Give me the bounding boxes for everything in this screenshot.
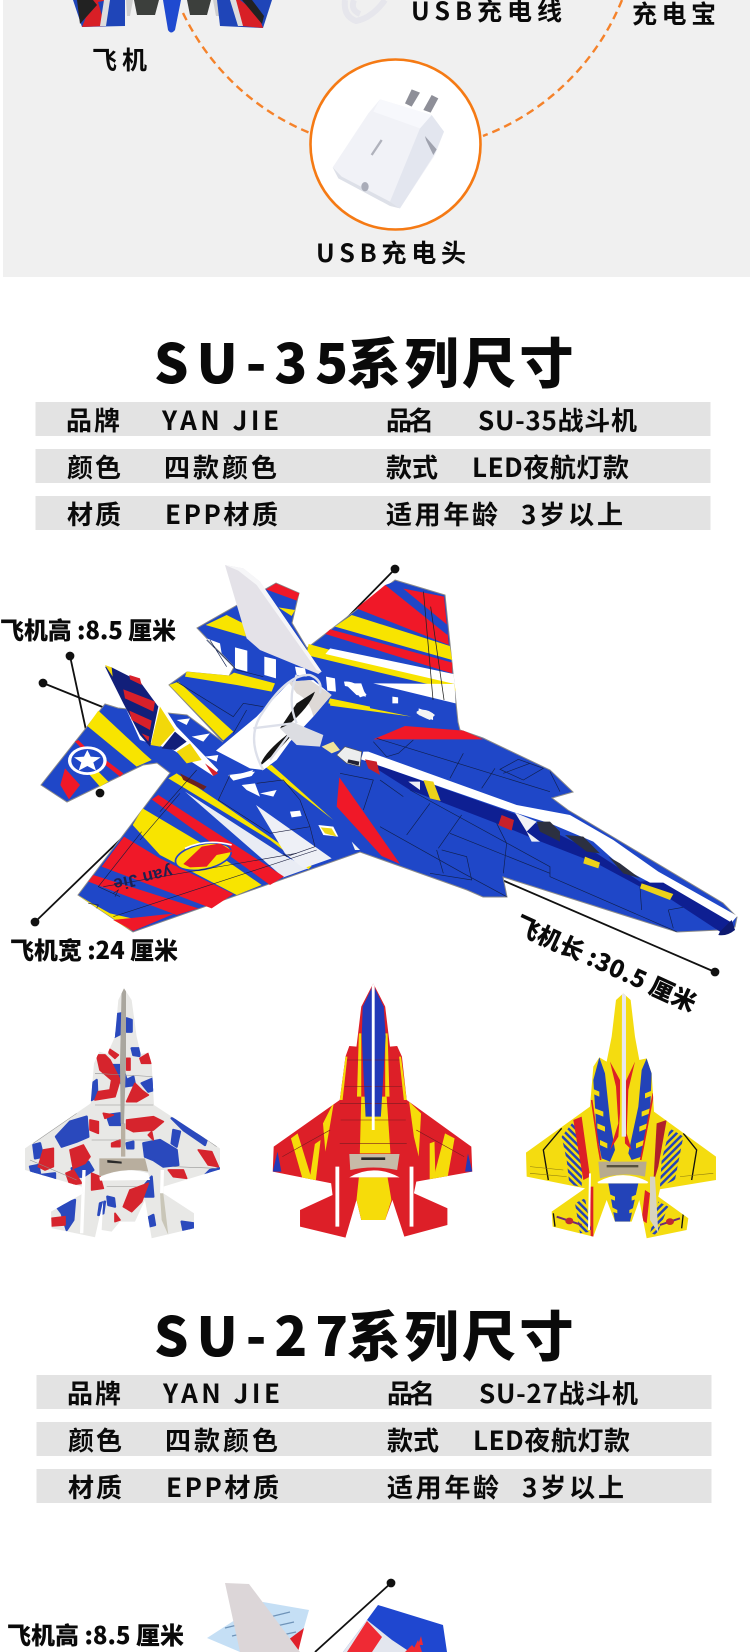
far fin white xyxy=(225,565,322,674)
heading: SU-27 series dimensions: SU-27 xyxy=(154,1293,356,1372)
tail colours xyxy=(88,772,108,787)
fuselage details xyxy=(337,710,737,935)
near fin xyxy=(103,663,218,776)
plane silhouette xyxy=(41,580,737,932)
plane: camouflage white xyxy=(25,988,220,1238)
far wing white and red xyxy=(343,1620,410,1652)
spec: style: 款式 xyxy=(387,1421,439,1458)
chart: SU-35 main plane xyxy=(41,565,737,935)
spec: material: 材质 xyxy=(68,1468,122,1505)
panel: SU-27 spec table xyxy=(36,1374,712,1505)
stabilizer stripes xyxy=(225,1612,296,1644)
panel: accessories on grey background xyxy=(3,0,750,277)
guard ring xyxy=(253,675,321,770)
spec: brand value: YAN JIE xyxy=(162,1374,280,1411)
spec: material: 材质 xyxy=(67,495,121,532)
root cutouts xyxy=(228,772,338,837)
spec: brand: 品牌 xyxy=(67,1374,121,1411)
navy canopy floor xyxy=(362,759,735,932)
spec: color value: 四款颜色 xyxy=(165,1421,278,1458)
label: plane length: 飞机长 :30.5 厘米 xyxy=(510,906,703,1019)
coloured tags xyxy=(365,759,514,831)
icon: airplane fragment xyxy=(73,0,272,32)
icon: usb charger in orange circle xyxy=(310,60,480,230)
white vertical fin xyxy=(225,1583,300,1652)
spec: material value: EPP材质 xyxy=(166,1468,279,1505)
panel lines xyxy=(177,640,263,733)
white canopy frame xyxy=(361,752,737,923)
spec: age: 适用年龄 xyxy=(386,495,498,532)
far wing xyxy=(343,1605,447,1652)
motor xyxy=(280,722,323,747)
spec: age: 适用年龄 xyxy=(387,1468,499,1505)
stabilizer light blue xyxy=(207,1602,309,1652)
plane: red and yellow xyxy=(273,983,472,1238)
spec: product name: 品名 xyxy=(387,1374,435,1411)
spec: style value: LED夜航灯款 xyxy=(473,1421,630,1458)
dimension lines behind main plane xyxy=(32,566,718,976)
heading: SU-35 series dimensions: SU-35 xyxy=(154,320,356,399)
heading: SU-35 series dimensions: 系列尺寸 xyxy=(347,320,577,399)
rear section, fins and motor xyxy=(68,565,370,777)
spec: age value: 3岁以上 xyxy=(521,495,623,532)
red tip xyxy=(288,1628,304,1652)
spec: age value: 3岁以上 xyxy=(522,1468,624,1505)
label: airplane: 飞机 xyxy=(92,41,147,77)
heading: SU-27 series dimensions: 系列尺寸 xyxy=(347,1293,577,1372)
yan jie logo text: yan Jie xyxy=(112,862,174,894)
spec: color value: 四款颜色 xyxy=(164,448,277,485)
small cutouts xyxy=(352,710,435,850)
tail xyxy=(87,711,152,767)
spec: brand value: YAN JIE xyxy=(161,401,279,438)
near wing and tail details xyxy=(60,761,338,932)
icon: dashed orange connector arcs xyxy=(183,0,622,136)
chart: SU-27 plane top fragment xyxy=(207,1580,447,1652)
spec: product name value: SU-27战斗机 xyxy=(479,1374,638,1411)
spec: style value: LED夜航灯款 xyxy=(472,448,629,485)
icon: usb cable xyxy=(345,0,385,21)
logo xyxy=(173,838,234,875)
ring opening xyxy=(216,680,332,770)
arch opening xyxy=(597,1175,648,1183)
motor mount xyxy=(288,680,332,717)
switch xyxy=(337,747,362,767)
spec: product name: 品名 xyxy=(386,401,434,438)
far wing stripes xyxy=(306,582,456,720)
dark slot xyxy=(180,773,207,790)
tail number and star mark xyxy=(405,1636,423,1652)
propeller xyxy=(260,692,315,766)
cockpit figures xyxy=(537,822,640,878)
label: usb charger: USB充电头 xyxy=(316,234,466,270)
fuselage cutouts near fin xyxy=(177,718,253,777)
panel: SU-35 spec table xyxy=(36,401,710,532)
label: plane width: 飞机宽 :24 厘米 xyxy=(10,931,178,966)
arch opening xyxy=(99,1170,150,1181)
upper stabilizer xyxy=(266,583,299,601)
spec: material value: EPP材质 xyxy=(165,495,278,532)
label: plane height: 飞机高 :8.5 厘米 xyxy=(0,611,176,646)
plane: yellow and blue xyxy=(526,993,716,1238)
panel lines xyxy=(340,738,687,932)
spec: product name value: SU-35战斗机 xyxy=(478,401,637,438)
label: SU-27 plane height: 飞机高 :8.5 厘米 xyxy=(7,1616,184,1651)
spec: style: 款式 xyxy=(386,448,438,485)
spec: brand: 品牌 xyxy=(66,401,120,438)
panel: color variants xyxy=(25,983,716,1238)
rear strip yellow xyxy=(185,672,275,692)
spec: color: 颜色 xyxy=(67,448,121,485)
spec: color: 颜色 xyxy=(68,1421,122,1458)
pointer line xyxy=(315,1580,394,1652)
wing panel lines xyxy=(88,770,317,917)
